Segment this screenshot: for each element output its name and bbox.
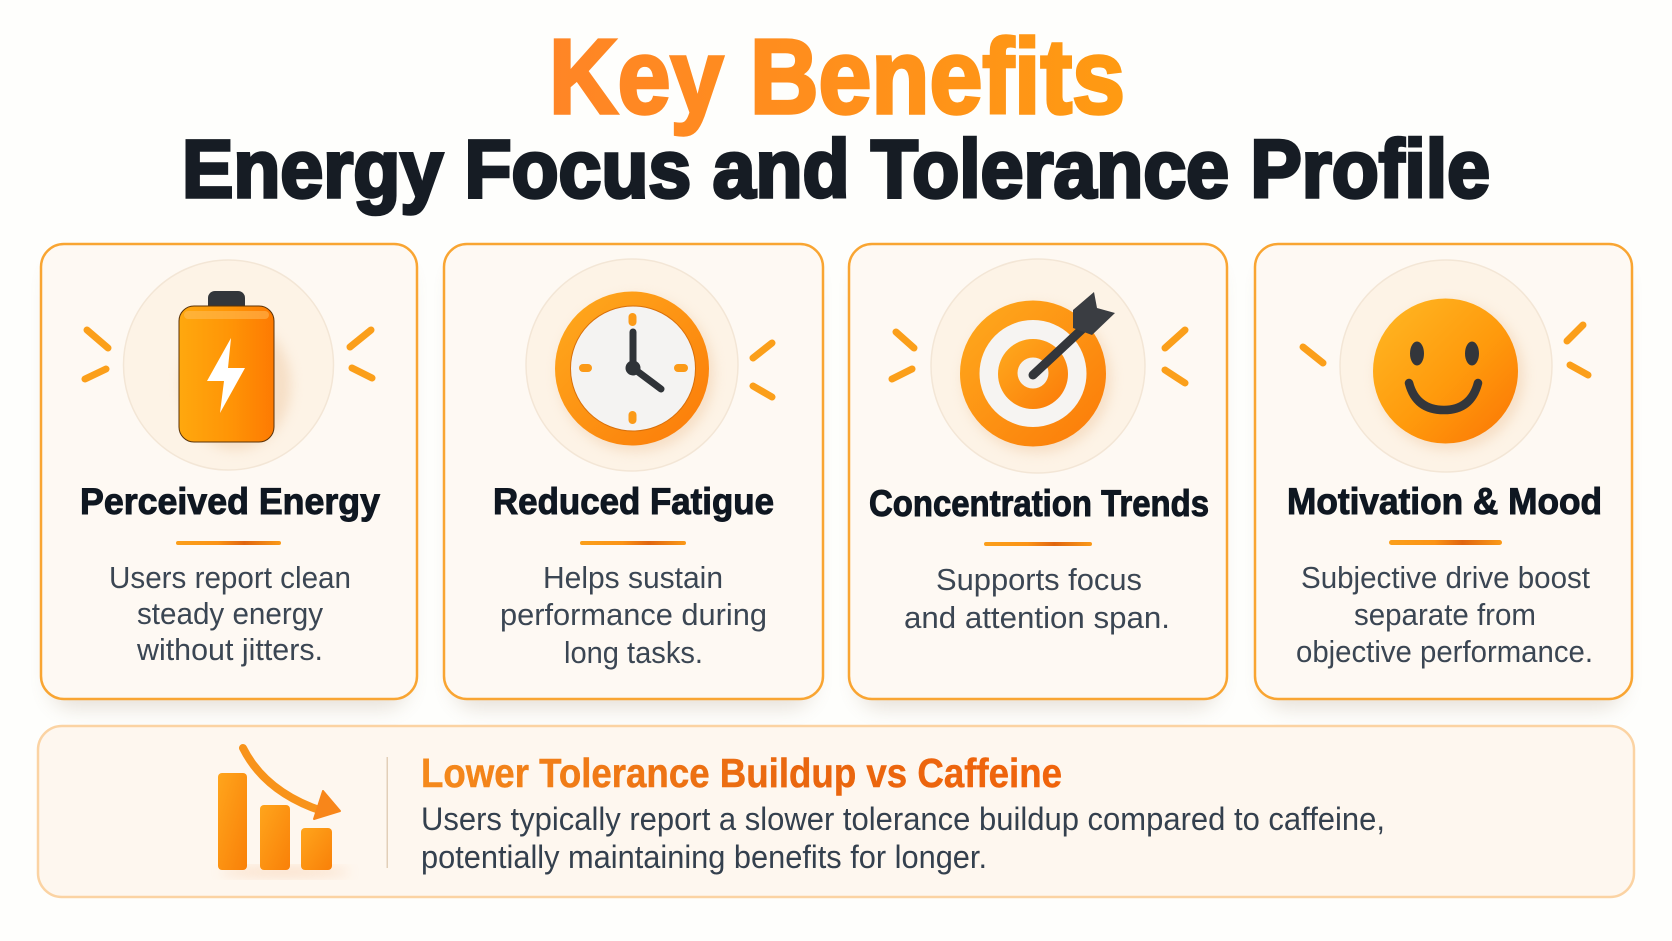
icon: target with arrow [960,292,1115,453]
description [1296,560,1593,669]
callout heading: Lower Tolerance Buildup vs Caffeine [421,750,1062,796]
description: and attention span. [904,600,1170,635]
panel: tolerance callout [38,726,1634,897]
description: objective performance. [1296,634,1593,669]
description: Helps sustain [543,560,723,595]
panel: Reduced Fatigue [444,244,823,708]
description: Users report clean [109,560,351,595]
heading: Key Benefits: Key Benefits [549,18,1125,136]
icon: clock [555,292,714,452]
description: long tasks. [564,635,703,670]
description: separate from [1354,597,1536,632]
description: Subjective drive boost [1301,560,1590,595]
description: without jitters. [136,632,323,667]
description [500,560,767,670]
description [904,562,1170,635]
icon: rays [1303,325,1588,375]
divider [1389,540,1502,545]
subtitle: Energy Focus and Tolerance Profile [182,124,1490,215]
card title: Motivation & Mood [1287,481,1602,522]
icon: energy rays [85,330,372,379]
panel: Concentration Trends [849,244,1227,708]
divider [580,541,686,545]
divider [176,541,281,545]
callout text: Users typically report a slower tolerance buildup compared to caffeine, [421,801,1385,837]
description [109,560,351,667]
icon: smiley [1373,298,1524,450]
callout text: potentially maintaining benefits for longer. [421,839,987,875]
description: steady energy [137,596,323,631]
callout text [421,801,1385,875]
panel: Perceived Energy [41,244,417,708]
panel: Motivation & Mood [1255,244,1632,708]
description: Supports focus [936,562,1142,597]
icon: battery [179,291,291,450]
card title: Reduced Fatigue [493,481,774,522]
card title: Concentration Trends [869,483,1209,524]
card title: Perceived Energy [80,481,380,522]
divider [984,542,1092,546]
description: performance during [500,597,767,632]
divider line [386,757,388,868]
icon: rays [753,343,772,397]
icon: rays [892,330,1185,383]
icon: declining bars with arrow [218,748,350,877]
